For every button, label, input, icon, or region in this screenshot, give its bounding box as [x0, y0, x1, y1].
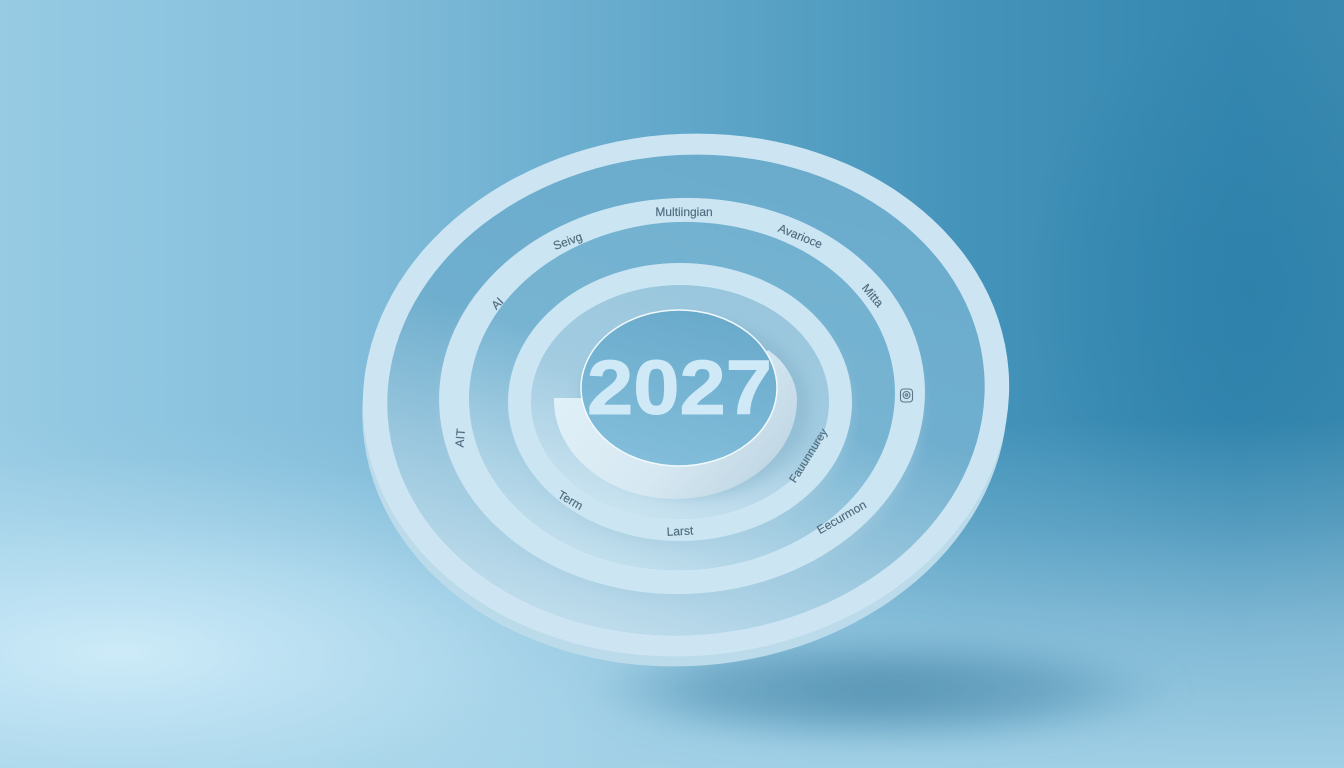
third ring [508, 263, 852, 541]
second ring [431, 188, 933, 604]
icon: spiral badge [900, 389, 912, 402]
label: Multiingian: Multiingian [655, 205, 713, 219]
label: Seivg: Seivg [551, 230, 584, 253]
second ring shadow [441, 214, 923, 598]
label: Larst: Larst [666, 523, 694, 539]
label: Avarioce: Avarioce [776, 221, 825, 252]
year label: 2027 [587, 345, 772, 431]
outer ring [343, 109, 1029, 681]
floor shadow [580, 635, 1180, 745]
label: AI: AI [488, 294, 506, 312]
inner crescent [554, 310, 810, 499]
central opening [581, 310, 777, 466]
label: Eecurmon: Eecurmon [814, 498, 869, 537]
label: Mitta: Mitta [859, 281, 887, 310]
concentric ring diagram [343, 109, 1029, 691]
label: AIT: AIT [452, 427, 468, 448]
third ring shadow [512, 274, 852, 546]
ring labels [452, 205, 887, 539]
label: Fauunnurey: Fauunnurey [788, 427, 831, 485]
outer disc edge [343, 119, 1027, 691]
label: Term: Term [555, 488, 585, 513]
